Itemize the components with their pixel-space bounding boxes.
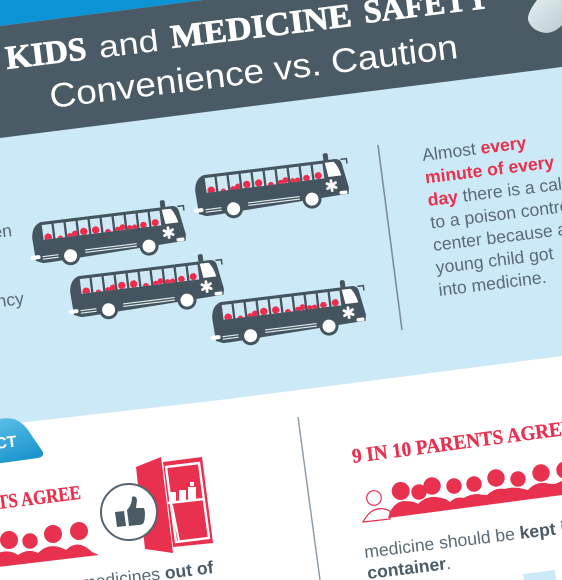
title: kids and medicine safety: [4, 0, 491, 77]
bus icon 1: [26, 198, 189, 270]
title: kids and medicine safety: KIDS: [4, 31, 88, 77]
background: white lower section: [0, 356, 562, 580]
light blue box: [523, 570, 556, 580]
title banner: [0, 0, 562, 138]
icon: red medicine cabinet: [136, 457, 213, 553]
blue tab: fact: [0, 418, 43, 464]
text block: every minute of every day: [421, 132, 562, 300]
text block: every minute of every day: into medicine.: [437, 267, 547, 300]
bus icon 4: [206, 278, 369, 350]
title: kids and medicine safety: MEDICINE: [169, 0, 354, 56]
icon: pill capsule: [528, 0, 562, 33]
icon: thumbs up in circle: [101, 484, 157, 540]
bus icon 3: [189, 151, 352, 223]
bus icon 2: [64, 252, 227, 324]
filled people: [388, 461, 562, 518]
people icon row left: [0, 522, 99, 567]
subtitle: convenience vs caution: Convenience vs. Caution: [47, 28, 460, 116]
text block: every minute of every day: minute of every: [424, 152, 555, 187]
outline person: [363, 491, 390, 522]
people icon row right: [363, 461, 562, 522]
text block: every minute of every day: Almost every: [421, 132, 528, 165]
text block: every minute of every day: young child got: [435, 243, 555, 277]
title: kids and medicine safety: and: [97, 23, 160, 65]
top blue band: [0, 0, 203, 26]
